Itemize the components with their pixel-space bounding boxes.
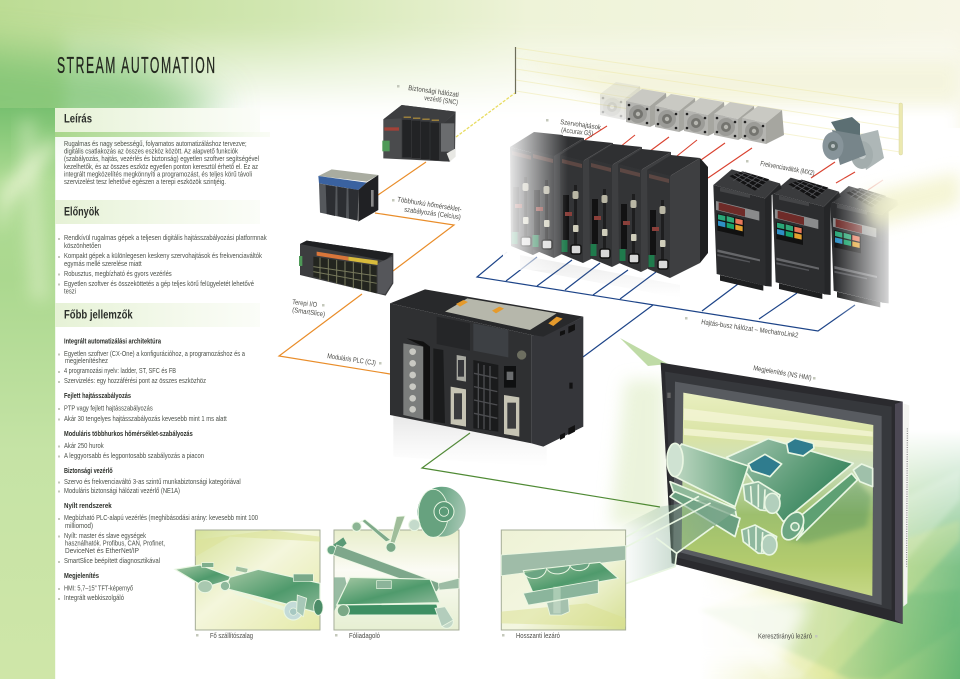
label: SmartSlice [292,299,325,319]
label: drive bus: Hajtás-busz hálózat – MechatroLink2 [701,319,799,340]
feature list: megjelenítéshez [65,356,108,365]
heading band: Leírás [55,108,270,137]
benefits list: köszönhetően [64,241,101,250]
gear right [853,464,873,487]
feature list: 4 programozási nyelv: ladder, ST, SFC és FB [64,366,176,375]
blue drive bus network [477,252,855,357]
feature list [58,336,258,602]
pale glow beside inverters [862,172,960,228]
labels: machine sections [196,633,818,640]
text panel white backdrop [55,137,270,200]
feature list: Akár 30 tengelyes hajtásszabályozás kevesebb mint 1 ms alatt [64,414,227,423]
panel frame [501,530,626,630]
title: STREAM AUTOMATION [57,52,215,78]
SmartSlice remote I/O [299,241,393,296]
description text: (szabályozás, hajtás, vezérlés és biztonság) egyetlen szoftver segítségével [64,154,259,163]
reflection below HMI [668,570,810,665]
feature list: Szervizelés: egy hozzáférési pont az összes eszközhöz [64,376,206,385]
machine panel: foil feeder [327,483,470,630]
modular PLC (CJ) [390,289,583,467]
labels: machine sections: Fő szállítószalag [210,633,253,640]
label: servo drives: (Accurax G5) [561,127,593,138]
label: servo drives: Szervohajtások [560,119,602,132]
HMI small logo [667,393,671,398]
rollers [668,444,748,507]
HMI touch panel [620,363,909,624]
heading band: Előnyök: Előnyök [64,205,100,219]
panel: description [55,108,270,186]
gear lower [742,525,777,553]
feature list: A leggyorsabb és legpontosabb szabályozás a piacon [64,451,204,460]
description text [64,139,259,186]
benefits list: Kompakt gépek a különlegesen keskeny szervohajtások és frekvenciaváltók [64,251,262,260]
heading band: Főbb jellemzők: Főbb jellemzők [64,307,133,321]
benefits list: Egyetlen szoftver és összeköttetés a gép teljes körű felügyeletét lehetővé [64,279,254,288]
feature list: Szervo és frekvenciaváltó 3-as szintű munkabiztonsági kategóriával [64,477,241,486]
description text: kezelhetők, és az összes eszköz egyetlen ponton keresztül érhető el. Ez az [64,162,258,171]
label: temperature controller [392,197,463,221]
HMI screen [682,393,873,596]
orange controller network wire [378,162,426,195]
frequency inverters [713,169,901,328]
servo motors [600,82,784,144]
panel: benefits [55,200,267,296]
heading band: Főbb jellemzők [55,303,260,327]
description text: integrált megközelítés megkönnyíti a programozást, és teljes körű távoli [64,170,252,178]
label: frequency inverters [746,160,815,177]
label: servo drives [546,119,602,138]
feature list: DeviceNet és EtherNet/IP [65,546,139,555]
orange wire: SmartSlice to PLC [279,294,390,374]
label: SmartSlice: Terepi I/O [292,299,318,309]
label: frequency inverters: Frekvenciaváltók (MX2) [760,161,815,177]
heading band: Leírás: Leírás [64,112,92,126]
machine line art on screen [620,438,873,587]
machine panel: longitudinal sealer [501,530,626,630]
AC motors [822,117,884,170]
HMI frame [661,363,903,624]
servo drives [503,125,708,298]
gear upper [743,482,780,512]
feature list: Megbízható PLC-alapú vezérlés (meghibásodási arány: kevesebb mint 100 [64,513,258,522]
panel: key features [55,303,260,602]
HMI back edge [903,403,909,607]
feature list: Nyílt rendszerek [64,501,112,510]
belt surface [727,439,853,522]
feature list: milliomod) [65,521,93,530]
feature list: Integrált webkiszolgáló [64,593,124,602]
label: safety network controller: Biztonsági hálózati [408,85,460,99]
keys [787,438,814,456]
beam overlay [620,500,737,587]
benefits list: Rendkívül rugalmas gépek a teljesen digitális hajtásszabályozási platformnak [64,233,267,242]
feature list: Nyílt: master és slave egységek [64,531,146,540]
labels: machine sections: Hosszanti lezáró [516,633,560,640]
benefits list: Robusztus, megbízható és gyors vezérlés [64,269,172,278]
green field wire [422,433,660,507]
feature list: Moduláris biztonsági hálózati vezérlő (NE1A) [64,486,180,495]
front roller [777,508,808,544]
white lower panel backdrop [55,224,270,679]
label: SmartSlice: (SmartSlice) [292,307,325,319]
feature list: Fejlett hajtásszabályozás [64,391,131,400]
labels: machine sections: Fóliadagoló [349,633,380,640]
label: safety network controller [397,85,460,107]
belt underside [797,473,857,540]
light curtain: poles and beams [516,47,902,155]
feature list: Megjelenítés [64,571,99,580]
label: drive bus [685,317,799,340]
benefits list: egymás mellé szerelése miatt [64,259,142,268]
orange wire: temperature controller to SmartSlice [375,213,454,271]
feature list: HMI: 5,7–15" TFT-képernyő [64,584,133,592]
label: safety network controller: vezérlő (SNC) [424,95,458,107]
label: HMI: Megjelenítés (NS HMI) [753,365,812,382]
green ray field, lower right [700,430,960,679]
feature list: SmartSlice beépített diagnosztikával [64,556,160,565]
description text: digitális csatlakozás az összes eszköz között. Az alapvető funkciók [64,146,238,156]
safety network controller SNC [382,105,456,162]
label: temperature controller: Többhurkú hőmérséklet- [397,197,463,214]
red motor cables [585,126,883,190]
heading band: Előnyök [55,200,260,224]
feature list: Biztonsági vezérlő [64,466,113,475]
feature list: Akár 250 hurok [64,441,104,450]
benefits list [58,233,267,296]
feature list: PTP vagy fejlett hajtásszabályozás [64,404,153,412]
safety network wire (yellow dashed) [456,93,515,137]
PLC reflection [393,415,547,467]
belt shadow [787,480,872,543]
foil roll [414,483,470,540]
panel frame [195,530,320,630]
feature list: Integrált automatizálási architektúra [64,336,162,346]
description text: Rugalmas és nagy sebességű, folyamatos automatizáláshoz tervezve; [64,139,247,148]
machine panel: main conveyor [175,530,323,630]
feature list: Moduláris többhurkos hőmérséklet-szabályozás [64,429,193,438]
label: temperature controller: szabályozás (Celcius) [404,207,461,221]
label: modular PLC: Moduláris PLC (CJ) [327,353,376,367]
feature list: Egyetlen szoftver (CX-One) a konfigurációhoz, a programozáshoz és a [64,349,245,358]
feature list: használhatók. Profibus, CAN, Profinet, [65,538,165,548]
labels: machine sections: Keresztirányú lezáró [758,634,812,640]
description text: szervizelést tesz lehetővé egészen a terepi eszközök szintjéig. [64,177,226,186]
multi-loop temperature controller [318,169,378,222]
panel frame [334,530,459,630]
benefits list: teszi [64,286,76,296]
